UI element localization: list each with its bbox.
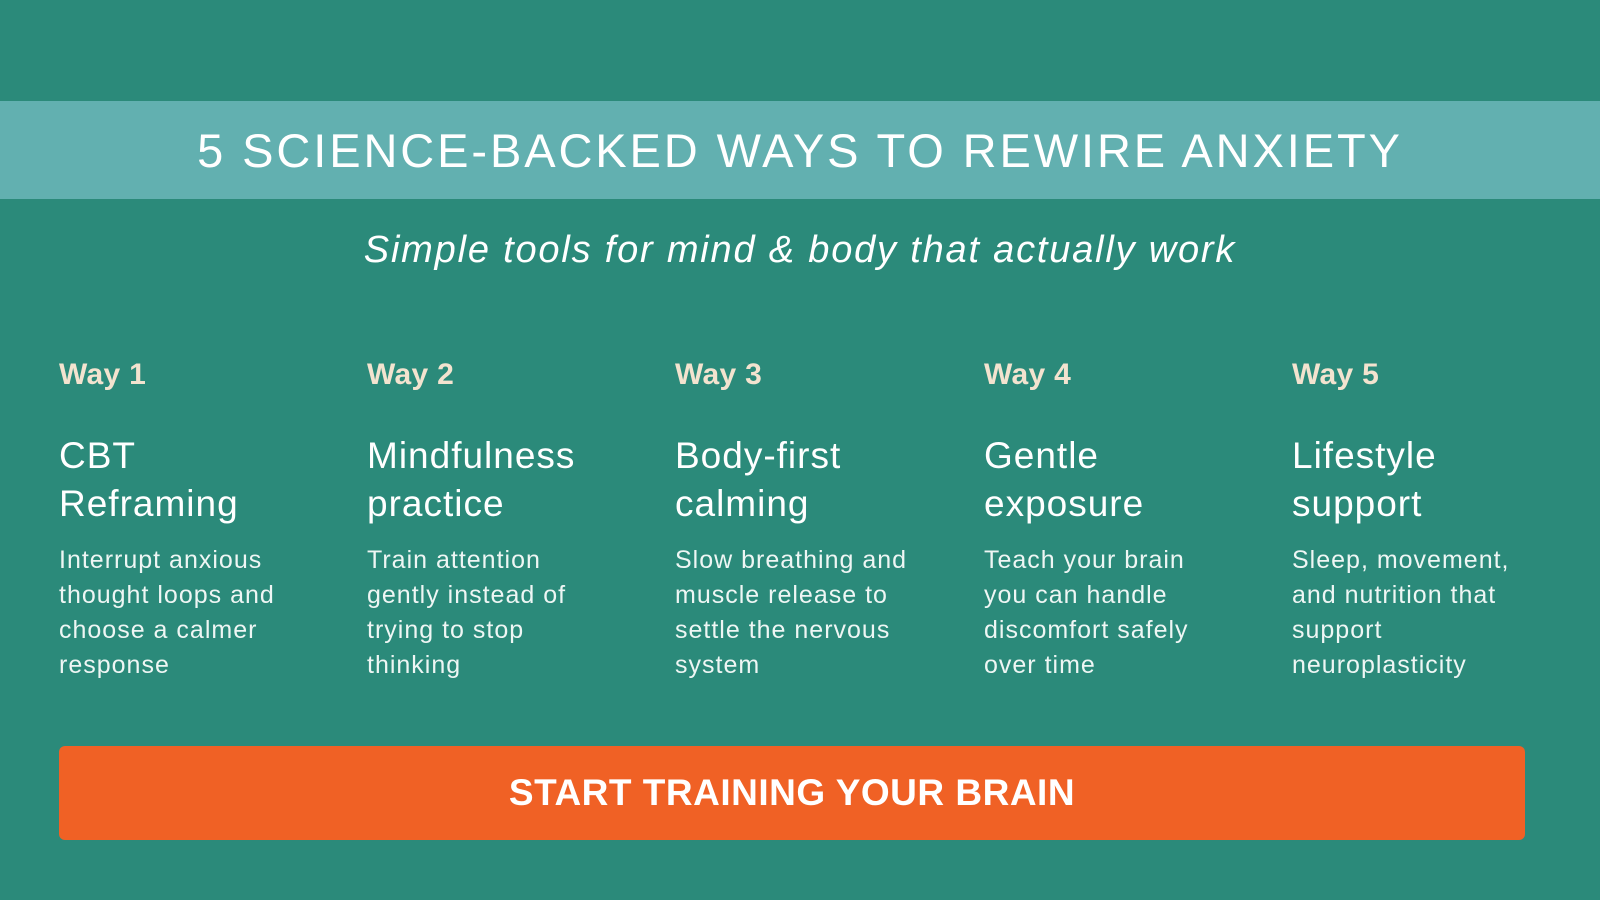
column: way 5: Sleep, movement, and nutrition that support neuroplasticity [1292,546,1510,679]
column: way 1: CBT [59,435,136,476]
column: way 2 [367,358,575,679]
column: way 5: support [1292,483,1422,524]
call to action button [59,746,1525,840]
subtitle: Simple tools for mind & body that actually work [364,229,1236,271]
title banner [0,101,1600,199]
column: way 5: Lifestyle [1292,435,1437,476]
column: way 1 [59,358,275,679]
column: way 3: Slow breathing and muscle release to settle the nervous system [675,546,907,679]
column: way 3: calming [675,483,810,524]
column: way 2: Mindfulness [367,435,575,476]
column: way 3: Way 3 [675,358,762,391]
column: way 2: Train attention gently instead of trying to stop thinking [367,546,566,679]
column: way 2: Way 2 [367,358,454,391]
column: way 1: Way 1 [59,358,146,391]
column: way 4: Way 4 [984,358,1071,391]
column: way 4: exposure [984,483,1144,524]
call to action button: START TRAINING YOUR BRAIN [509,772,1075,813]
title banner: 5 SCIENCE-BACKED WAYS TO REWIRE ANXIETY [197,124,1403,176]
column: way 2: practice [367,483,505,524]
column: way 4: Gentle [984,435,1099,476]
column: way 4: Teach your brain you can handle discomfort safely over time [984,546,1189,679]
column: way 3: Body-first [675,435,841,476]
column: way 3 [675,358,907,679]
column: way 5: Way 5 [1292,358,1379,391]
column: way 1: Reframing [59,483,239,524]
column: way 5 [1292,358,1510,679]
column: way 4 [984,358,1189,679]
column: way 1: Interrupt anxious thought loops and choose a calmer response [59,546,275,679]
